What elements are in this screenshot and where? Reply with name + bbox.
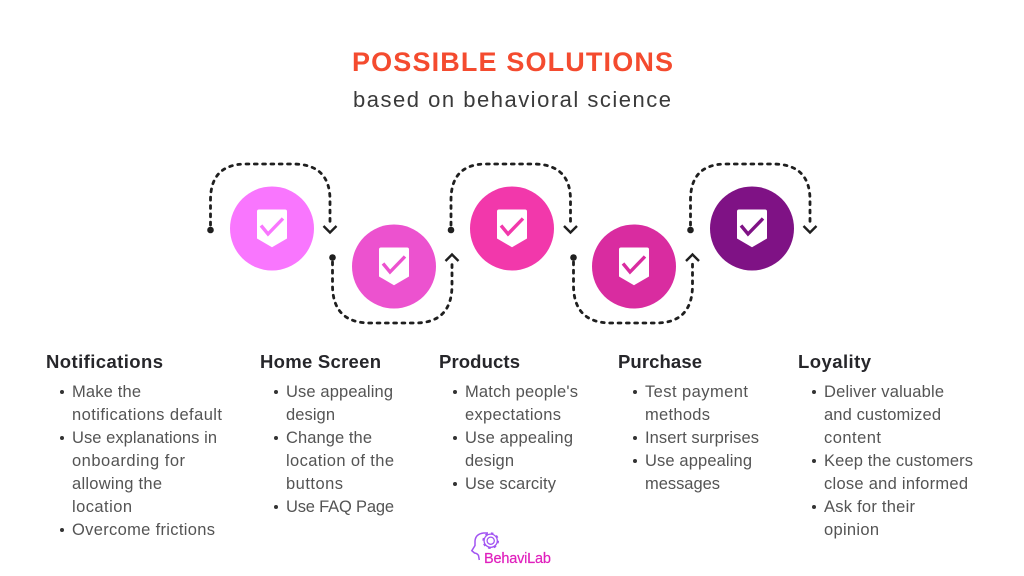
panel: products: Use scarcity [465,475,557,493]
panel: purchase: messages [645,475,720,493]
panel: notifications: notifications default [72,406,222,424]
panel: home screen: design [286,406,335,424]
panel: purchase [618,351,759,493]
icon: step 5 badge [710,186,794,270]
dashed connector 4 [570,254,699,323]
logo: BehaviLab: BehaviLab [484,551,551,567]
icon: step 4 badge [592,224,676,308]
logo: BehaviLab [472,533,551,567]
panel: purchase: methods [645,406,710,424]
panel: products: Use appealing [465,429,573,447]
panel: products [439,351,578,493]
panel: loyality: opinion [824,521,879,539]
panel: purchase: Use appealing [645,452,752,470]
panel: loyality: Deliver valuable [824,383,944,401]
panel: home screen [260,351,394,516]
panel: loyality: and customized [824,406,941,424]
panel: home screen: Home Screen [260,351,381,372]
panel: purchase: Insert surprises [645,429,759,447]
panel: home screen: buttons [286,475,343,493]
panel: purchase: Test payment [645,383,748,401]
dashed connector 5 [687,164,816,233]
panel: products: Products [439,351,520,372]
panel: notifications: Notifications [46,351,163,372]
panel: loyality: Keep the customers [824,452,973,470]
panel: notifications: allowing the [72,475,162,493]
dashed connector 3 [448,164,577,233]
panel: notifications: location [72,498,132,516]
panel: home screen: Change the [286,429,372,447]
panel: notifications: Make the [72,383,141,401]
panel: loyality: close and informed [824,475,968,493]
panel: home screen: Use appealing [286,383,393,401]
panel: notifications [46,351,222,539]
panel: notifications: Use explanations in [72,429,217,447]
subtitle: based on behavioral science [353,87,671,112]
panel: loyality [798,351,973,539]
panel: products: Match people's [465,383,578,401]
panel: products: design [465,452,514,470]
icon: step 3 badge [470,186,554,270]
panel: purchase: Purchase [618,351,702,372]
dashed connector 1 [207,164,336,233]
panel: loyality: content [824,429,881,447]
title: POSSIBLE SOLUTIONS [352,47,673,77]
dashed connector 2 [329,254,458,323]
panel: products: expectations [465,406,561,424]
icon: step 1 badge [230,186,314,270]
panel: notifications: Overcome frictions [72,521,215,539]
panel: home screen: Use FAQ Page [286,498,394,516]
panel: home screen: location of the [286,452,394,470]
panel: loyality: Ask for their [824,498,916,516]
panel: notifications: onboarding for [72,452,186,470]
panel: loyality: Loyality [798,351,872,372]
icon: step 2 badge [352,224,436,308]
